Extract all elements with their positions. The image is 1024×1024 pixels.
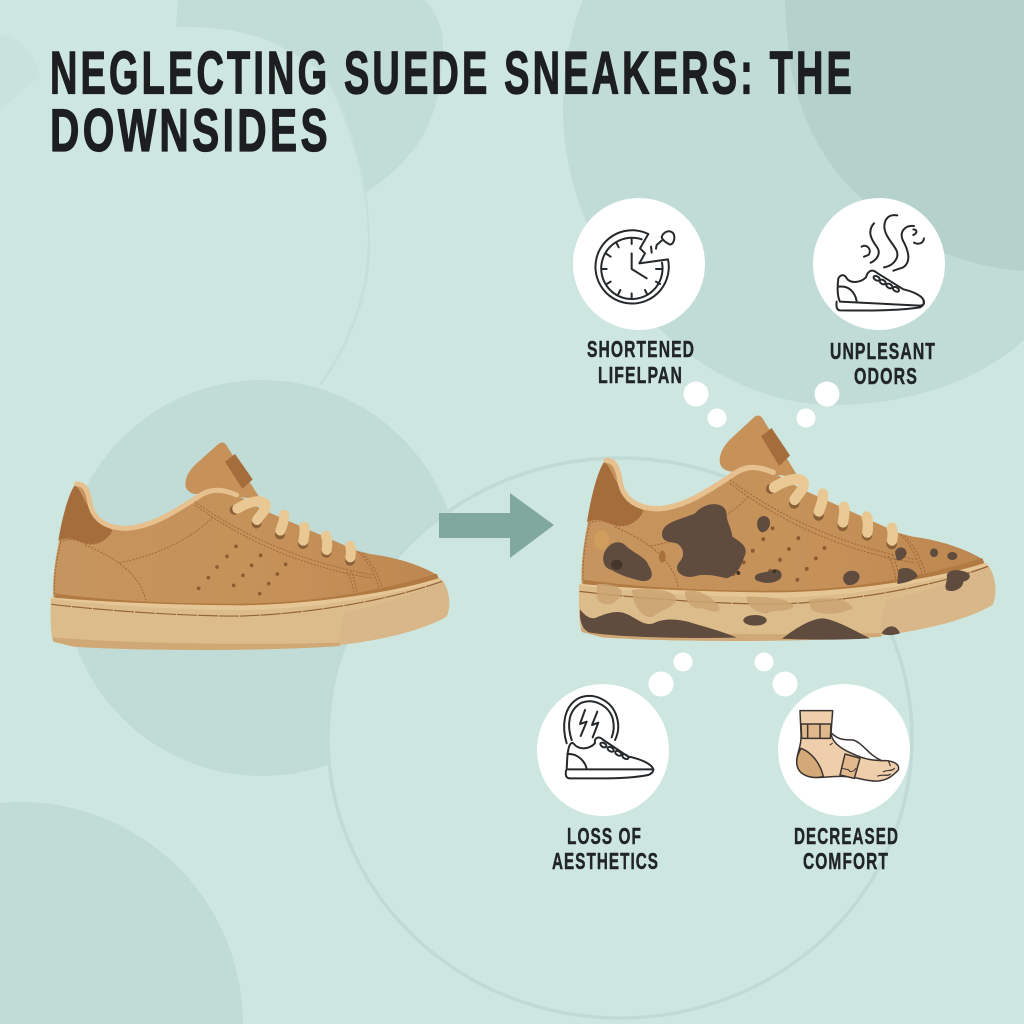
label: LOSS OF bbox=[567, 823, 642, 849]
clean sneaker bbox=[51, 443, 449, 650]
label: SHORTENED bbox=[587, 336, 695, 362]
white circle badge bbox=[537, 684, 669, 816]
title: DOWNSIDES bbox=[50, 97, 331, 164]
white circle badge bbox=[573, 198, 705, 330]
label bbox=[552, 823, 659, 874]
arrow bbox=[439, 493, 554, 558]
panel: loss of aesthetics bbox=[537, 684, 669, 874]
label: COMFORT bbox=[803, 848, 889, 874]
icon: broken clock bbox=[595, 230, 674, 304]
label: AESTHETICS bbox=[552, 848, 659, 874]
label: ODORS bbox=[854, 363, 918, 389]
icon: faded sneaker with lightning bbox=[564, 696, 653, 778]
label bbox=[830, 338, 936, 389]
icon: bandaged foot bbox=[797, 711, 899, 781]
label bbox=[587, 336, 695, 388]
label: UNPLESANT bbox=[830, 338, 936, 364]
panel: shortened lifespan bbox=[573, 198, 705, 388]
icon: smelly sneaker bbox=[836, 215, 924, 310]
white circle badge bbox=[813, 198, 945, 330]
label: DECREASED bbox=[794, 823, 899, 849]
white circle badge bbox=[778, 684, 910, 816]
title bbox=[50, 40, 855, 164]
neglected stained sneaker bbox=[579, 415, 995, 641]
label: LIFELPAN bbox=[598, 362, 683, 388]
panel: unpleasant odors bbox=[813, 198, 945, 389]
thought bubble dots bbox=[648, 382, 840, 696]
mud stains bbox=[580, 504, 970, 640]
panel: decreased comfort bbox=[778, 684, 910, 874]
label bbox=[794, 823, 899, 874]
